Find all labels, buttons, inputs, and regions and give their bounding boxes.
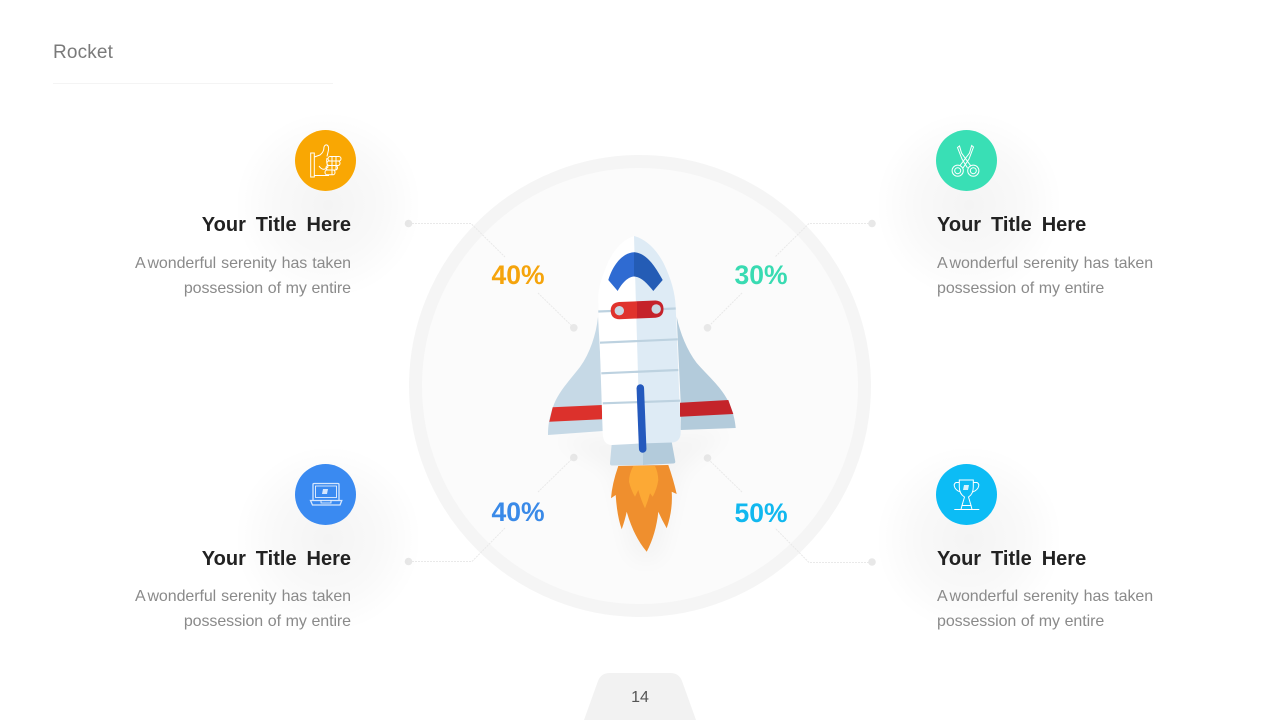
panel: top left [135, 130, 356, 296]
central circle [409, 155, 871, 617]
rocket body [598, 236, 681, 445]
description: A wonderful serenity has taken [937, 254, 1153, 272]
wings [548, 317, 736, 435]
description [135, 254, 351, 296]
description: possession of my entire [184, 280, 351, 296]
flame [611, 465, 677, 552]
page number tab: 14 [631, 689, 649, 706]
heading: Your Title Here [202, 548, 351, 570]
description: possession of my entire [937, 280, 1104, 296]
description [937, 254, 1153, 296]
blue centre bar [640, 388, 643, 449]
panel: top right [936, 130, 1153, 296]
heading: Your Title Here [937, 548, 1086, 570]
description: A wonderful serenity has taken [135, 588, 351, 604]
percentage: top right: 30% [734, 260, 788, 290]
page number tab [584, 673, 696, 720]
icon: laptop [295, 464, 356, 525]
description [937, 588, 1153, 630]
description [135, 588, 351, 630]
panel: bottom right [936, 464, 1153, 630]
red window band [611, 300, 664, 319]
description: possession of my entire [937, 612, 1104, 630]
icon: scissors [936, 130, 997, 191]
icon: thumbs up [295, 130, 356, 191]
blue nose band [608, 252, 663, 291]
heading: Your Title Here [202, 214, 351, 236]
percentage: bottom right: 50% [734, 498, 788, 528]
heading: Your Title Here [937, 214, 1086, 236]
nozzle [610, 442, 675, 466]
panel: bottom left [135, 464, 356, 630]
icon: trophy [936, 464, 997, 525]
description: A wonderful serenity has taken [135, 254, 351, 272]
percentage: top left: 40% [491, 260, 545, 290]
percentage: bottom left: 40% [491, 497, 545, 527]
slide title: Rocket [53, 42, 113, 63]
description: possession of my entire [184, 612, 351, 630]
description: A wonderful serenity has taken [937, 588, 1153, 604]
